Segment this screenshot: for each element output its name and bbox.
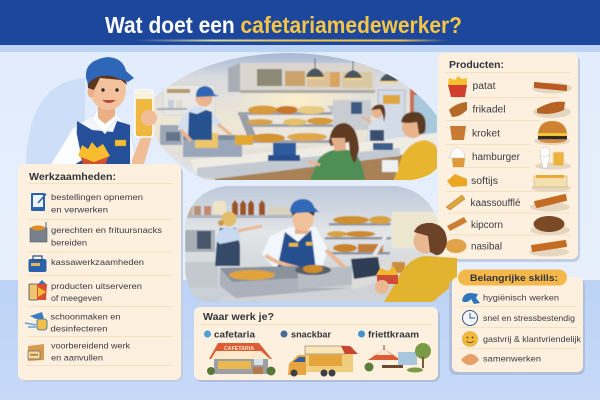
neck and head [98, 100, 115, 124]
item: serving: producten uitserveren [51, 281, 142, 291]
product labels: patat [472, 81, 496, 92]
heading: Waar werk je? [203, 311, 274, 323]
item: cleaning [50, 312, 121, 334]
shelves with jars and bottles [185, 200, 297, 288]
skill: hospitality: gastvrij & klantvriendelijk [483, 334, 582, 344]
back staff member [178, 86, 231, 141]
product labels: nasibal [471, 242, 502, 252]
item: orders: en verwerken [51, 204, 108, 214]
location: friettkraam: friettkraam [368, 330, 419, 340]
hood and menu boards [228, 63, 375, 93]
heading: Werkzaamheden: [29, 171, 116, 183]
skill: teamwork: samenwerken [483, 354, 541, 364]
shirt [50, 116, 138, 182]
panel: Waar werk je [194, 307, 440, 382]
hero: employee with fries and beer [50, 57, 157, 182]
item: preparation: voorbereidend werk [51, 340, 131, 350]
location: friettkraam [358, 330, 431, 372]
item: cooking: bereiden [51, 238, 87, 248]
skill: speed: snel en stressbestendig [483, 313, 575, 323]
main employee [262, 199, 345, 270]
item: preparation: en aanvullen [51, 352, 103, 362]
apron [76, 121, 130, 182]
back shelves left [157, 85, 215, 145]
item: cooking: gerechten en frituursnacks [51, 225, 162, 235]
icon: smiley [462, 332, 478, 346]
icon: order tablet [31, 193, 46, 211]
skills heading pill: Belangrijke skills: [470, 273, 558, 284]
fryer with food [220, 257, 405, 298]
customer in yellow hoodie [382, 112, 438, 182]
skill: hygiene: hygiënisch werken [483, 292, 559, 302]
location: snackbar [280, 330, 358, 376]
product labels [470, 81, 521, 252]
customer in green [308, 123, 365, 180]
item: cleaning: schoonmaken en [50, 312, 121, 322]
item: till: kassawerkzaamheden [51, 257, 144, 267]
product labels: frikadel [472, 104, 506, 116]
customer with snack, overlapping the panels [375, 223, 457, 302]
item: orders [51, 192, 143, 214]
cashier [362, 105, 386, 141]
icon: drinks and takeaway cup [29, 280, 47, 300]
item: serving: of meegeven [51, 293, 102, 303]
product labels: hamburger [472, 152, 521, 163]
icon: stock box [28, 344, 44, 361]
icon: cash register [28, 256, 46, 272]
item: serving [51, 281, 142, 303]
item: cleaning: desinfecteren [50, 324, 108, 334]
food shelves right [325, 212, 438, 256]
icon: handshake [461, 354, 479, 365]
title banner [0, 0, 600, 45]
right product icons [529, 82, 572, 256]
icon: clock [462, 310, 478, 326]
left product icons [446, 76, 467, 253]
location: cafetaria: cafetaria [214, 330, 256, 340]
product labels: kaassoufflé [470, 198, 521, 209]
scene: kitchen counter with staff and customers [150, 50, 440, 182]
counter [221, 270, 400, 301]
left arm and fries [50, 126, 82, 172]
item: cooking [51, 225, 162, 248]
icon: hygiene hand [462, 293, 480, 304]
product labels: softijs [471, 176, 498, 187]
location: cafetaria: CAFETARIA [224, 346, 254, 352]
icon: spray bottle [25, 312, 47, 330]
icon: fry basket [30, 222, 47, 242]
panel: Producten [438, 53, 580, 262]
scene: fryer station [185, 184, 440, 304]
product labels: kipcorn [471, 220, 503, 231]
product labels: kroket [472, 128, 500, 140]
panel: Belangrijke skills [449, 270, 585, 375]
assistant at the back [215, 212, 262, 266]
location: snackbar: snackbar [291, 330, 331, 340]
right wall: drinks fridge [333, 88, 437, 143]
item: orders: bestellingen opnemen [51, 192, 143, 202]
counter [150, 132, 440, 182]
title banner: Wat doet een cafetariamedewerker? [105, 12, 462, 38]
heading: Producten: [449, 60, 504, 71]
item: preparation [51, 340, 131, 362]
pendant lamps [306, 58, 398, 83]
right arm and beer glass [131, 132, 152, 179]
location: cafetaria [204, 330, 276, 376]
food display case [238, 105, 334, 144]
panel: Werkzaamheden [18, 164, 183, 382]
